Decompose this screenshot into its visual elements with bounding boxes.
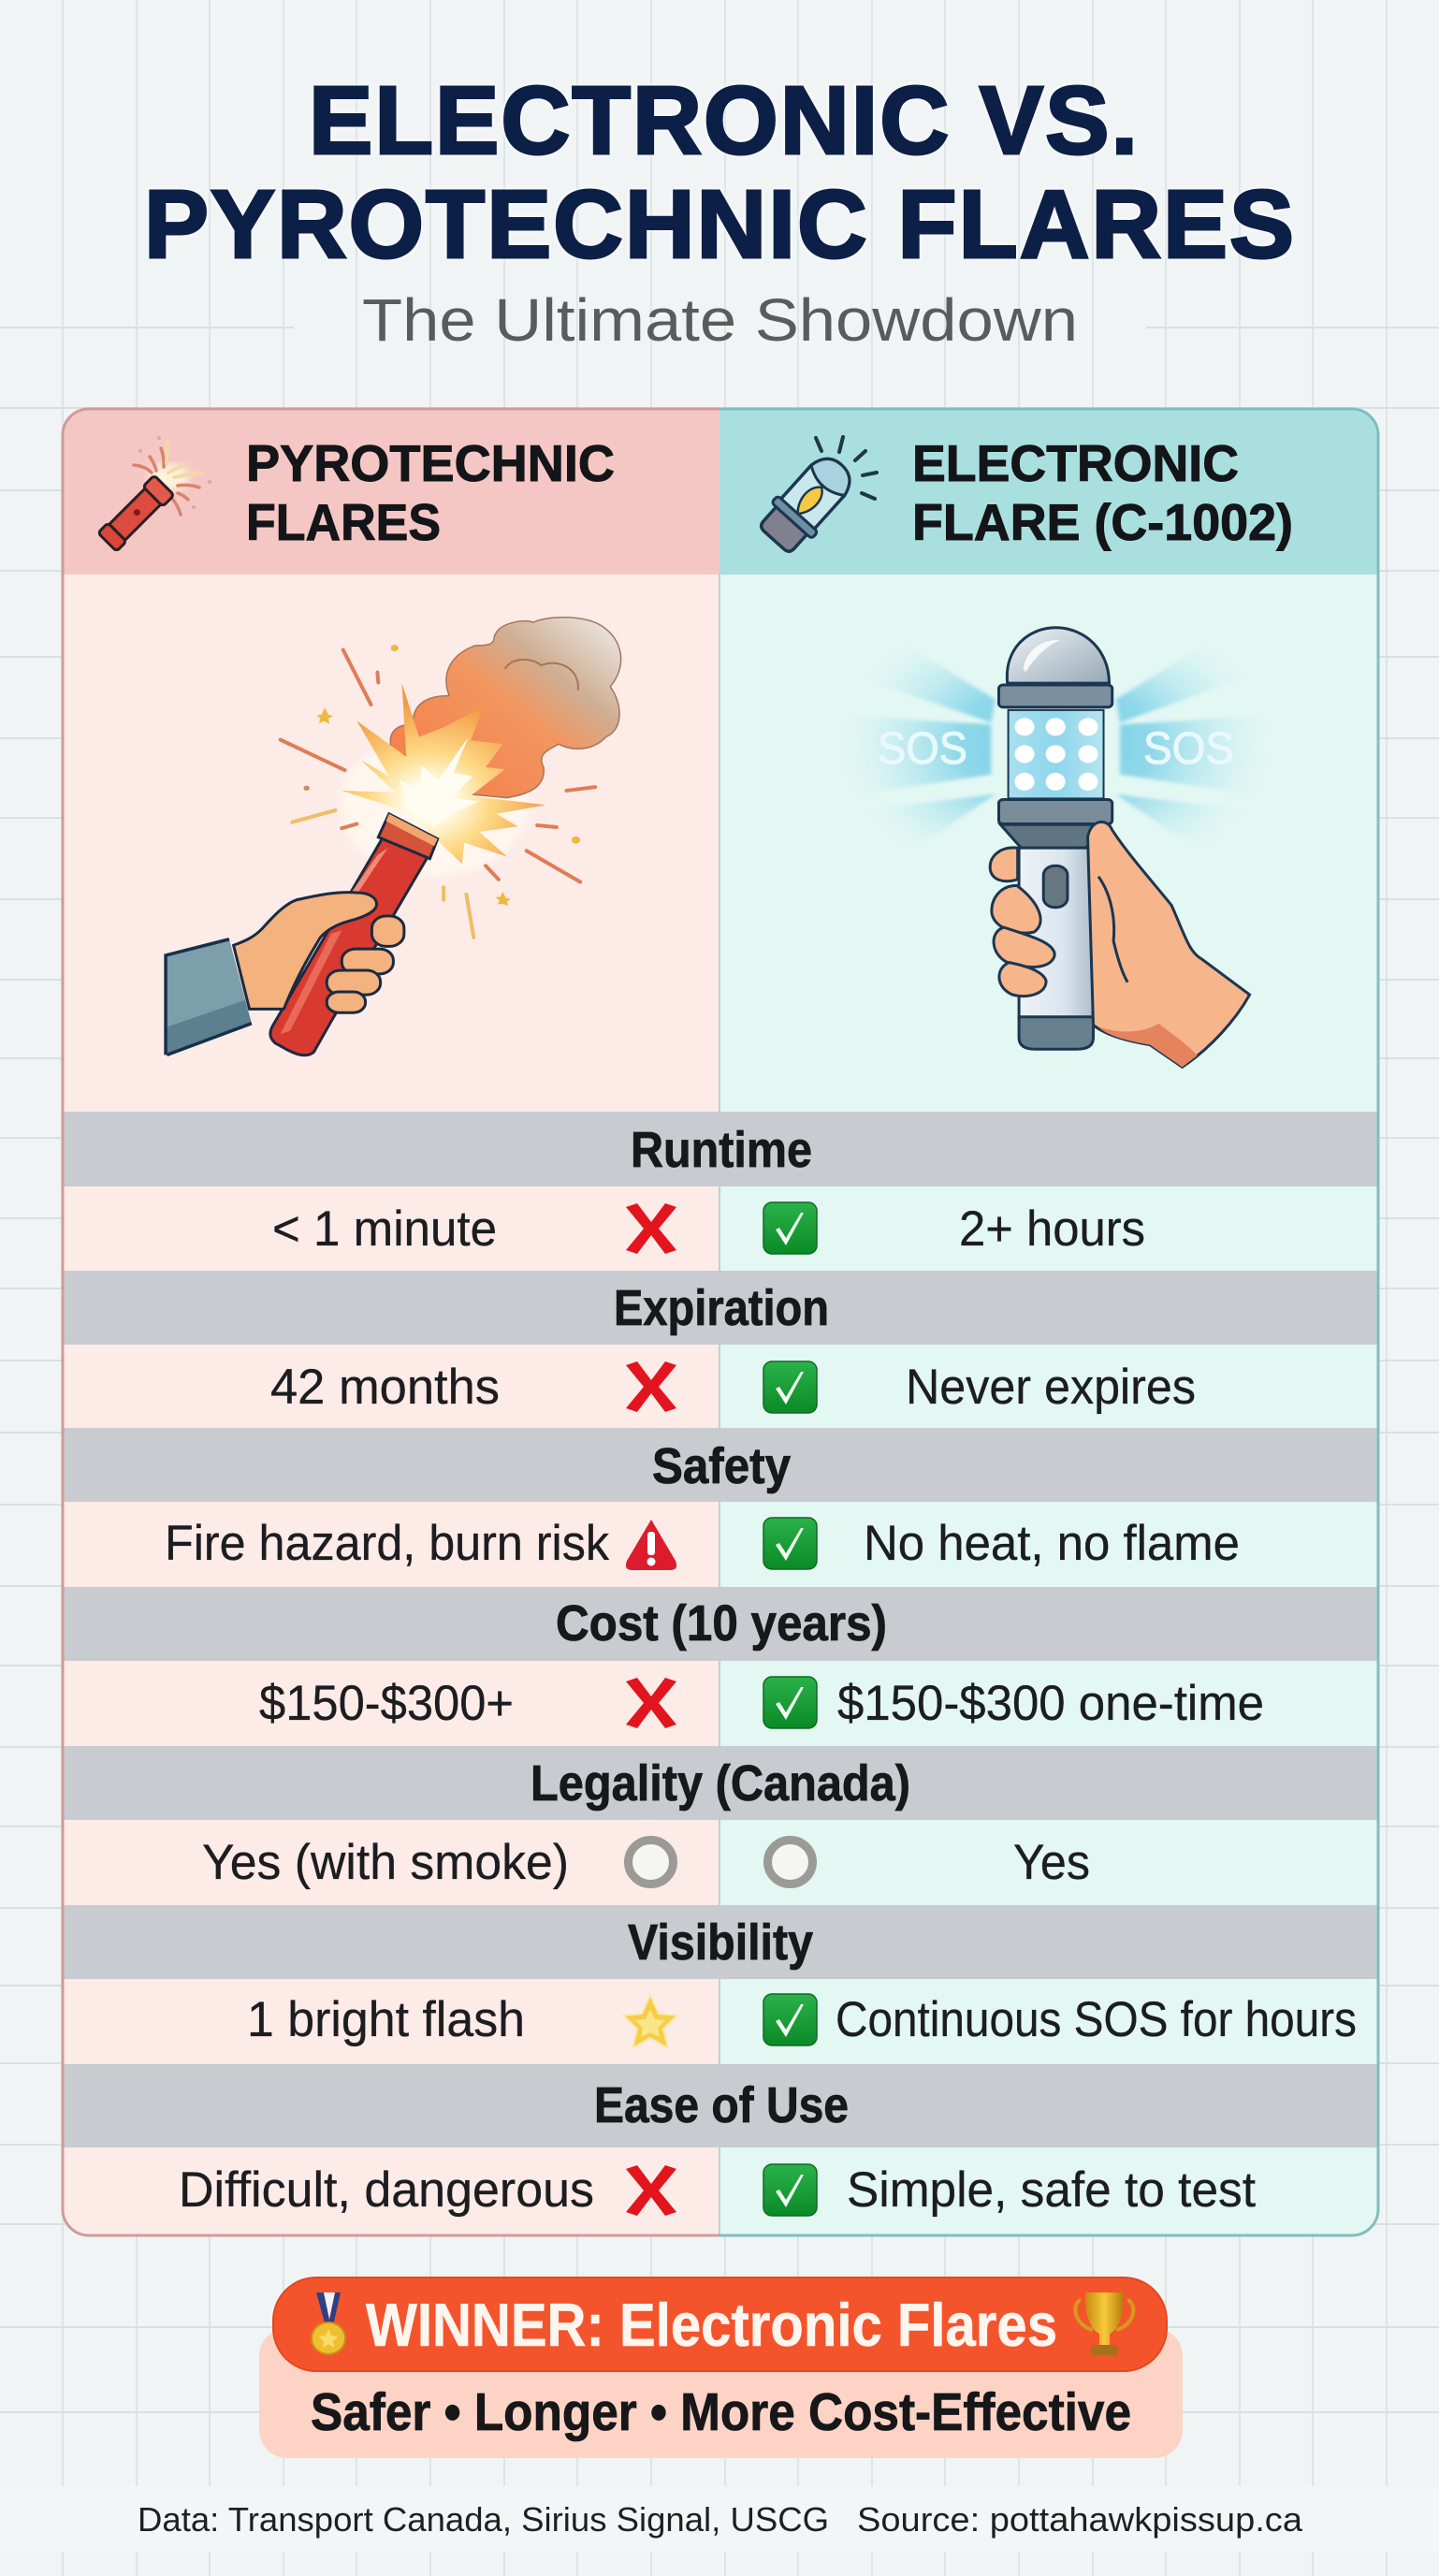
- row: expiration: Never expires: [906, 1360, 1196, 1415]
- row: visibility: Continuous SOS for hours: [836, 1992, 1357, 2047]
- icon: warning triangle: [626, 1520, 676, 1570]
- sparks: [281, 650, 595, 938]
- row: legality: Yes (with smoke): [202, 1835, 569, 1890]
- lower collar: [998, 799, 1112, 824]
- row: runtime: Runtime: [631, 1122, 812, 1178]
- heading: pyrotechnic flares: [246, 434, 615, 551]
- hand palm and thumb: [1088, 822, 1250, 1067]
- base cap: [1019, 1017, 1093, 1049]
- handle: [1019, 848, 1093, 1018]
- panel: comparison table: [62, 408, 1379, 2236]
- heading: electronic flare: FLARE (C-1002): [912, 493, 1293, 551]
- flare tube: [270, 837, 428, 1055]
- row: runtime: 2+ hours: [959, 1201, 1145, 1257]
- title: PYROTECHNIC FLARES: [144, 170, 1296, 278]
- subtitle: The Ultimate Showdown: [362, 286, 1078, 354]
- winner banner: WINNER: Electronic Flares: [366, 2291, 1057, 2359]
- icon: trophy: [1075, 2292, 1133, 2355]
- footer: data credit: Data: Transport Canada, Sirius Signal, USCG: [138, 2500, 829, 2539]
- sleeve: [166, 939, 252, 1055]
- row: safety: Safety: [652, 1438, 791, 1494]
- SOS left: SOS: [878, 724, 967, 774]
- row: safety: Fire hazard, burn risk: [165, 1516, 609, 1571]
- row: expiration: [270, 1280, 1196, 1415]
- row: legality: Legality (Canada): [531, 1755, 910, 1812]
- row: legality: [202, 1755, 1090, 1890]
- flash burst: [342, 683, 545, 864]
- heading: electronic flare: ELECTRONIC: [912, 434, 1239, 492]
- SOS right: SOS: [1143, 724, 1234, 774]
- row: cost: $150-$300+: [259, 1676, 514, 1731]
- smoke cloud: [390, 618, 621, 798]
- title: [144, 66, 1296, 278]
- row: runtime: [272, 1122, 1145, 1257]
- row: legality: Yes: [1013, 1835, 1090, 1890]
- icon: small electronic flare: [754, 437, 877, 559]
- winner banner: Safer • Longer • More Cost-Effective: [311, 2382, 1131, 2442]
- hand and thumb: [234, 893, 376, 1009]
- icon: medal: [312, 2292, 345, 2354]
- row: safety: [165, 1438, 1240, 1571]
- row: ease of use: Simple, safe to test: [847, 2162, 1256, 2218]
- LED window: [1009, 710, 1104, 798]
- row: visibility: Visibility: [628, 1914, 813, 1971]
- illustration: hand holding burning pyrotechnic flare: [166, 618, 621, 1055]
- icon: glowing star: [623, 1995, 677, 2048]
- illustration: hand holding electronic SOS flare: [836, 628, 1274, 1067]
- row: cost: Cost (10 years): [556, 1595, 887, 1652]
- icon: small pyrotechnic flare: [97, 436, 211, 552]
- row: visibility: 1 bright flash: [247, 1992, 525, 2047]
- row: expiration: Expiration: [614, 1280, 829, 1336]
- row: visibility: [247, 1914, 1357, 2048]
- row: cost: $150-$300 one-time: [837, 1676, 1264, 1731]
- row: ease of use: Difficult, dangerous: [179, 2162, 594, 2218]
- row: ease of use: Ease of Use: [594, 2077, 849, 2133]
- dome: [1007, 628, 1109, 683]
- heading: pyrotechnic flares: FLARES: [246, 493, 441, 551]
- footer: source credit: Source: pottahawkpissup.ca: [857, 2500, 1303, 2539]
- row: cost: [259, 1595, 1264, 1731]
- row: safety: No heat, no flame: [864, 1516, 1240, 1571]
- heading: pyrotechnic flares: PYROTECHNIC: [246, 434, 615, 492]
- heading: electronic flare: [912, 434, 1293, 551]
- row: runtime: < 1 minute: [272, 1201, 497, 1257]
- light rays: [836, 636, 1274, 855]
- upper collar: [998, 685, 1112, 707]
- title: ELECTRONIC VS.: [309, 66, 1140, 174]
- winner banner: [259, 2278, 1183, 2458]
- row: expiration: 42 months: [270, 1360, 500, 1415]
- fingers: [327, 916, 404, 1012]
- row: ease of use: [179, 2077, 1256, 2218]
- fingers: [990, 848, 1054, 997]
